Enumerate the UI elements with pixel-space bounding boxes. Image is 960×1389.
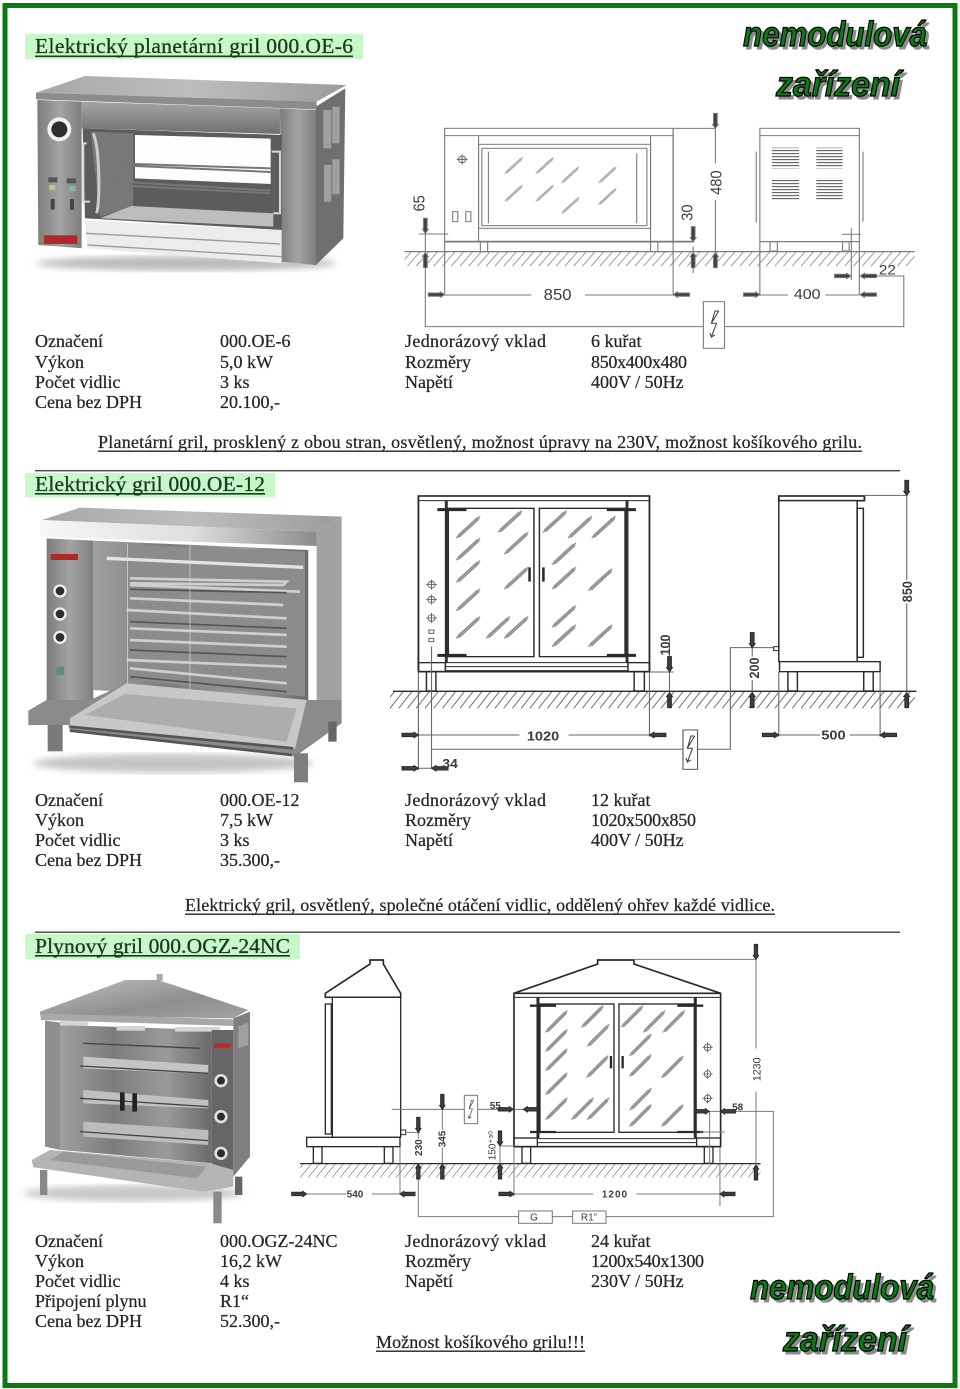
specification table: OGZ-24NC: Počet vidlic [35,1271,120,1291]
specification table: OGZ-24NC: 1200x540x1300 [591,1251,704,1271]
specification table: OE-12: 1020x500x850 [591,810,696,830]
specification table: OE-6: Jednorázový vklad [405,331,546,351]
specification table: OE-12: 000.OE-12 [220,790,300,810]
specification table: OE-12: Počet vidlic [35,830,120,850]
technical drawing: planetary grill: 480 [708,170,726,195]
note: basket grill option: Možnost košíkového grilu!!! [376,1332,585,1352]
specification table: OGZ-24NC: Jednorázový vklad [405,1231,546,1251]
photo: planetary grill [36,76,347,271]
logo: nemodulová zařízení [743,15,930,107]
technical drawing: planetary grill: 850 [544,287,572,304]
technical drawing: gas grill: 1200 [602,1190,628,1201]
specification table: OE-12: Napětí [405,830,453,850]
description: planetary grill: Planetární gril, prosklený z obou stran, osvětlený, možnost úpravy na 230V, možnost košíkového grilu. [98,432,862,452]
specification table: OE-6: Počet vidlic [35,372,120,392]
specification table: OE-6: Označení [35,331,103,351]
technical drawing: electric grill: 100 [657,634,673,656]
heading: electric grill: Elektrický gril 000.OE-12 [35,472,265,496]
logo: nemodulová zařízení: zařízení [778,68,907,107]
heading: gas grill: Plynový gril 000.OGZ-24NC [35,934,290,958]
logo: nemodulová zařízení: zařízení [775,65,904,104]
specification table: OE-6: Napětí [405,372,453,392]
specification table: OGZ-24NC: Označení [35,1231,103,1251]
section: gas grill 000.OGZ-24NC [23,934,937,1362]
specification table: OE-6: 20.100,- [220,392,280,412]
specification table: OE-12: Označení [35,790,103,810]
section: electric grill 000.OE-12 [25,472,917,915]
description: electric grill: Elektrický gril, osvětlený, společné otáčení vidlic, oddělený ohřev každé vidlice. [185,895,775,915]
logo: nemodulová zařízení bottom: nemodulová [750,1268,934,1307]
specification table: OGZ-24NC: Výkon [35,1251,84,1271]
technical drawing: electric grill: 34 [442,757,458,771]
specification table: OGZ-24NC: 000.OGZ-24NC [220,1231,338,1251]
technical drawing: electric grill: 850 [899,581,915,602]
technical drawing: electric grill: 1020 [527,728,559,744]
logo: nemodulová zařízení bottom: zařízení [785,1323,914,1362]
specification table: OE-12: Výkon [35,810,84,830]
specification table: OE-12: Jednorázový vklad [405,790,546,810]
specification table: OE-6: Cena bez DPH [35,392,142,412]
specification table: OGZ-24NC: 52.300,- [220,1311,280,1331]
specification table: OE-6: Rozměry [405,352,471,372]
specification table: OGZ-24NC: 24 kuřat [591,1231,650,1251]
specification table: OE-12: 400V / 50Hz [591,830,684,850]
logo: nemodulová zařízení: nemodulová [746,18,930,57]
technical drawing: gas grill: 150⁺³⁰ [487,1131,498,1160]
specification table: OE-12: 7,5 kW [220,810,273,830]
logo: nemodulová zařízení bottom [750,1268,937,1362]
technical drawing: gas grill: 540 [347,1190,364,1201]
technical drawing: electric grill: 500 [821,727,846,742]
specification table: OE-6: 400V / 50Hz [591,372,684,392]
technical drawing: planetary grill [405,113,915,348]
photo: gas grill [23,974,250,1223]
logo: nemodulová zařízení bottom: zařízení [782,1320,911,1359]
technical drawing: planetary grill: 22 [879,263,896,278]
specification table: OGZ-24NC: Připojení plynu [35,1291,146,1311]
technical drawing: gas grill: 345 [438,1130,449,1147]
specification table: OE-6: 3 ks [220,372,250,392]
technical drawing: electric grill: 200 [746,657,762,679]
specification table: OE-6: 850x400x480 [591,352,687,372]
specification table: OGZ-24NC: 4 ks [220,1271,250,1291]
specification table: OGZ-24NC: R1“ [220,1291,249,1311]
specification table: OGZ-24NC: 230V / 50Hz [591,1271,684,1291]
specification table: OGZ-24NC: Cena bez DPH [35,1311,142,1331]
photo: electric grill [28,508,342,782]
technical drawing: gas grill [292,944,773,1224]
specification table: OE-12: Cena bez DPH [35,850,142,870]
technical drawing: electric grill [390,480,917,771]
specification table: OE-6: 5,0 kW [220,352,273,372]
technical drawing: planetary grill: 30 [679,204,697,221]
specification table: OE-6: 6 kuřat [591,331,641,351]
technical drawing: gas grill: R1” [581,1213,597,1224]
technical drawing: planetary grill: 65 [411,195,428,211]
specification table: OE-12: 3 ks [220,830,250,850]
logo: nemodulová zařízení: nemodulová [743,15,927,54]
specification table: OGZ-24NC: 16,2 kW [220,1251,282,1271]
specification table: OE-12: 35.300,- [220,850,280,870]
logo: nemodulová zařízení bottom: nemodulová [753,1271,937,1310]
specification table: OGZ-24NC: Napětí [405,1271,453,1291]
specification table: OE-6: 000.OE-6 [220,331,290,351]
specification table: OE-12 [35,790,696,870]
technical drawing: gas grill: 230 [414,1139,425,1156]
specification table: OGZ-24NC: Rozměry [405,1251,471,1271]
specification table: OE-12: 12 kuřat [591,790,650,810]
specification table: OGZ-24NC [35,1231,704,1331]
specification table: OE-12: Rozměry [405,810,471,830]
specification table: OE-6: Výkon [35,352,84,372]
technical drawing: gas grill: 58 [732,1103,744,1114]
technical drawing: gas grill: G [530,1213,538,1224]
technical drawing: gas grill: 55 [490,1101,501,1112]
technical drawing: planetary grill: 400 [794,287,821,303]
heading: planetary grill: Elektrický planetární gril 000.OE-6 [35,34,353,58]
specification table: OE-6 [35,331,687,412]
technical drawing: gas grill: 1230 [751,1057,763,1081]
section: planetary grill 000.OE-6 [25,15,930,452]
